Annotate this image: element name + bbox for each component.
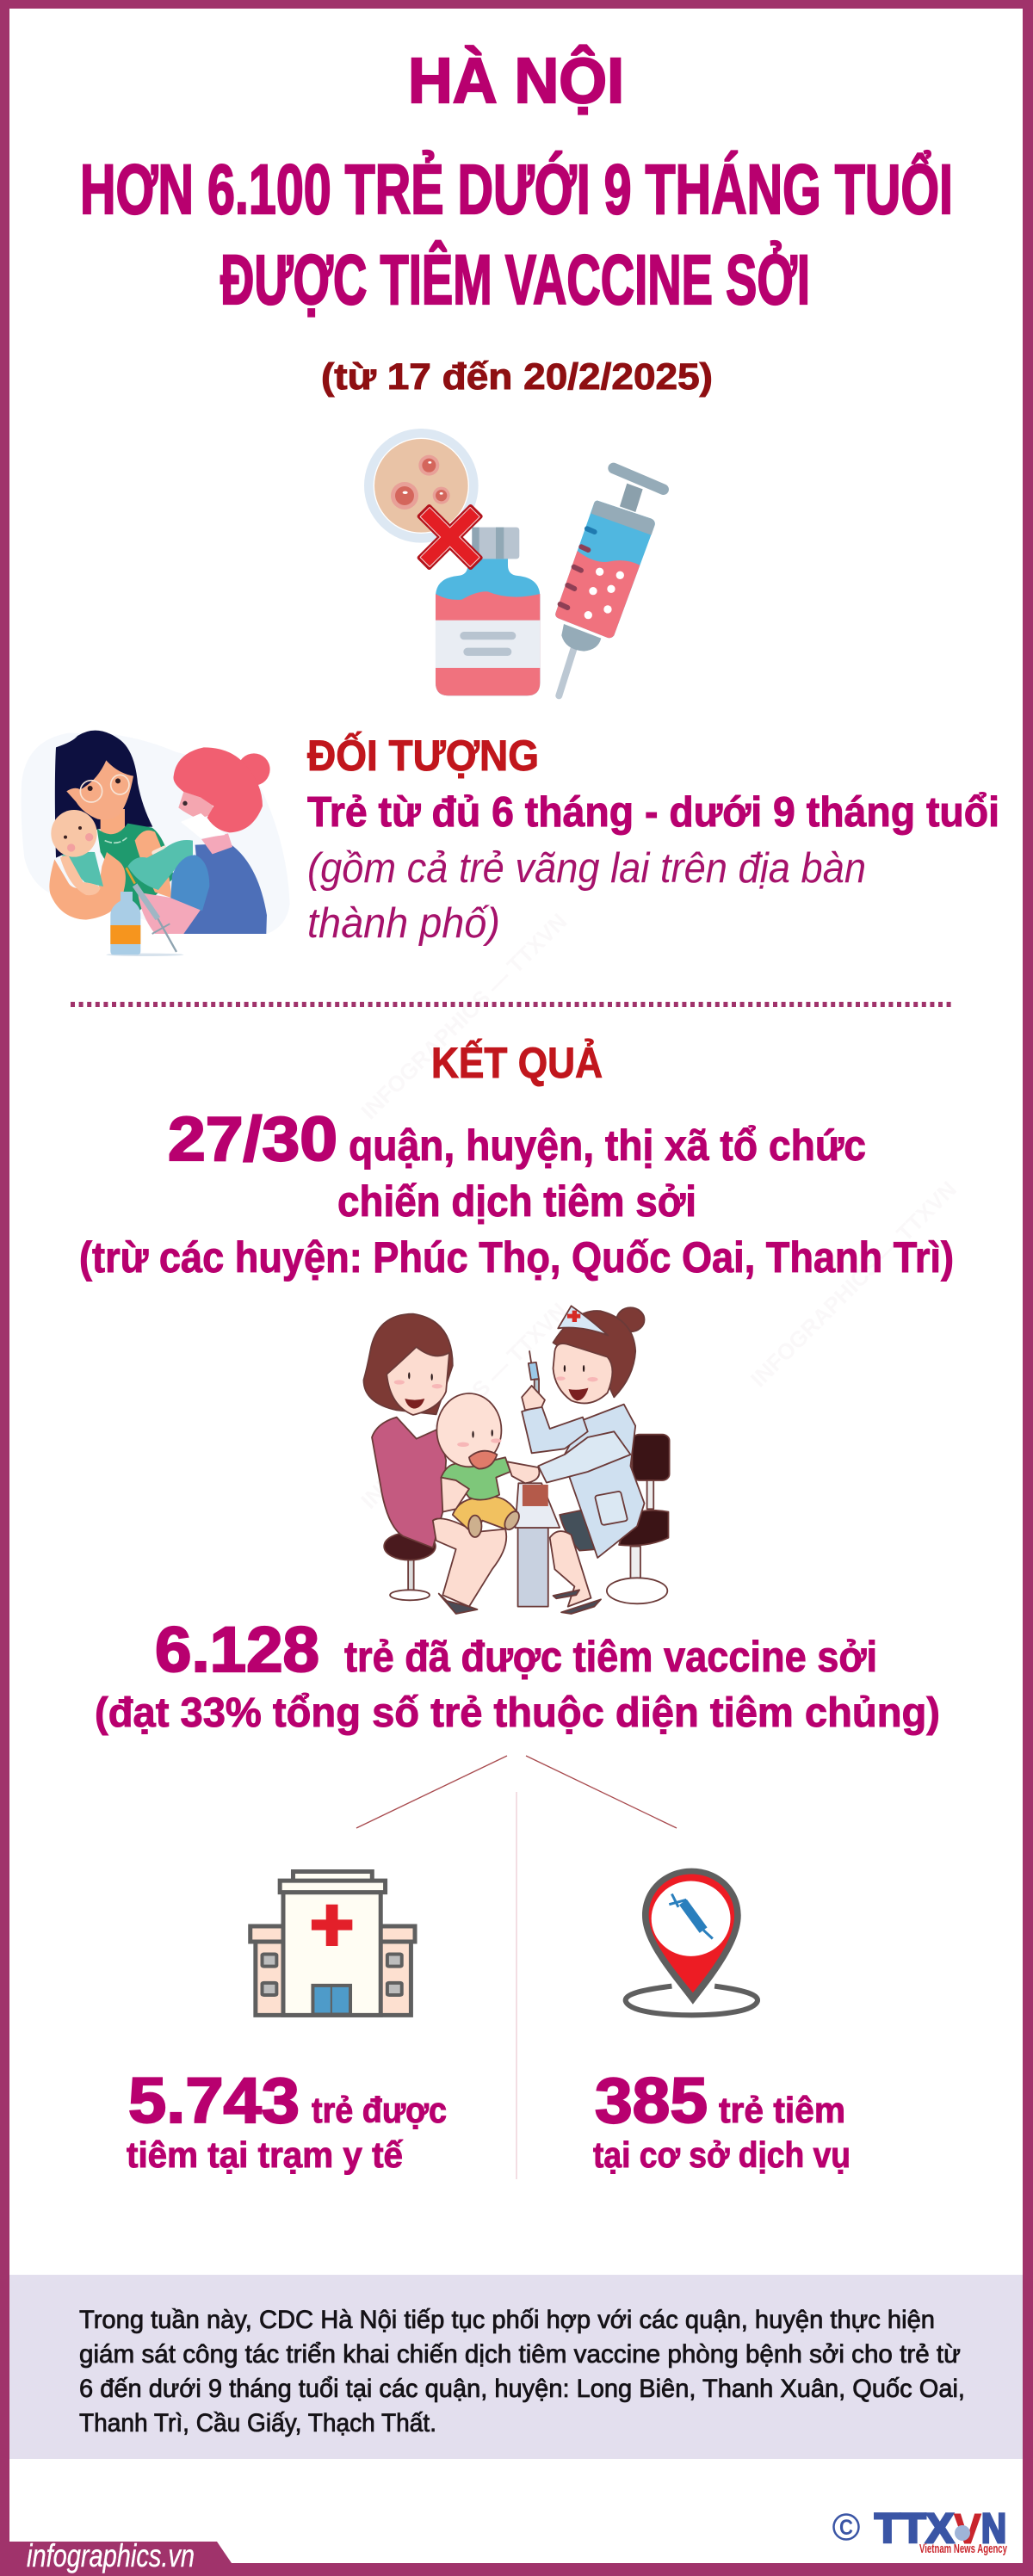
stat: 5.743 at health stations: trẻ được xyxy=(312,2090,447,2130)
panel: note: 6 đến dưới 9 tháng tuổi tại các quận, huyện: Long Biên, Thanh Xuân, Quốc Oai, xyxy=(79,2375,965,2403)
result: vaccinated total: (đạt 33% tổng số trẻ thuộc diện tiêm chủng) xyxy=(95,1690,940,1736)
result: vaccinated total: 6.128 xyxy=(155,1614,319,1685)
panel: note: Thanh Trì, Cầu Giấy, Thạch Thất. xyxy=(79,2409,436,2437)
target note text: (gồm cả trẻ vãng lai trên địa bàn xyxy=(307,845,866,892)
logo: TTXVN: TTX xyxy=(875,2506,954,2552)
logo: TTXVN: V xyxy=(954,2506,981,2553)
illustration: measles skin, vaccine vial and syringe xyxy=(364,429,664,695)
logo: TTXVN: N xyxy=(981,2506,1006,2552)
stat: 5.743 at health stations: 5.743 xyxy=(128,2065,300,2136)
text: INFOGRAPHICS — TTXVN xyxy=(745,1176,962,1392)
stat: 5.743 at health stations xyxy=(127,2065,447,2175)
result: vaccinated total: trẻ đã được tiêm vaccine sởi xyxy=(344,1633,877,1681)
heading: results: KẾT QUẢ xyxy=(431,1039,603,1087)
stat: 385 at service facilities: tại cơ sở dịch vụ xyxy=(593,2134,851,2175)
result: districts: (trừ các huyện: Phúc Thọ, Quốc Oai, Thanh Trì) xyxy=(79,1233,954,1282)
result: districts: chiến dịch tiêm sởi xyxy=(337,1177,696,1226)
logo: TTXVN: C xyxy=(839,2516,853,2540)
illustration: nurse vaccinating baby on mother's lap xyxy=(363,1306,670,1614)
target note text xyxy=(307,845,866,947)
result: districts: 27/30 xyxy=(168,1105,337,1174)
logo: TTXVN xyxy=(833,2506,1007,2556)
panel: note: Trong tuần này, CDC Hà Nội tiếp tục phối hợp với các quận, huyện thực hiện xyxy=(79,2306,935,2334)
stat: 5.743 at health stations: tiêm tại trạm y tế xyxy=(127,2134,404,2175)
date subtitle: (từ 17 đến 20/2/2025) xyxy=(321,356,713,398)
branch lines xyxy=(356,1756,677,1828)
heading: target group: ĐỐI TƯỢNG xyxy=(307,731,539,780)
title xyxy=(80,45,953,319)
result: districts: quận, huyện, thị xã tổ chức xyxy=(349,1121,866,1170)
footer tab: infographics.vn: infographics.vn xyxy=(27,2538,195,2573)
stat: 385 at service facilities xyxy=(593,2065,851,2175)
panel: note: giám sát công tác triển khai chiến dịch tiêm vaccine phòng bệnh sởi cho trẻ từ xyxy=(79,2340,961,2369)
result: vaccinated total xyxy=(95,1614,940,1736)
text: INFOGRAPHICS — TTXVN xyxy=(356,1298,572,1514)
result: districts xyxy=(79,1105,954,1282)
section: target group xyxy=(307,731,999,947)
icon: hospital xyxy=(251,1871,415,2015)
stat: 385 at service facilities: 385 xyxy=(595,2065,708,2136)
text: INFOGRAPHICS — TTXVN xyxy=(356,908,572,1124)
target note text: thành phố) xyxy=(307,900,500,947)
panel: note xyxy=(9,2275,1023,2459)
icon: location pin with syringe xyxy=(626,1869,758,2015)
target age text: Trẻ từ đủ 6 tháng - dưới 9 tháng tuổi xyxy=(307,789,999,836)
stat: 385 at service facilities: trẻ tiêm xyxy=(719,2090,845,2130)
illustration: mother holding baby with masked nurse xyxy=(22,731,290,956)
title: HÀ NỘI xyxy=(408,45,624,116)
